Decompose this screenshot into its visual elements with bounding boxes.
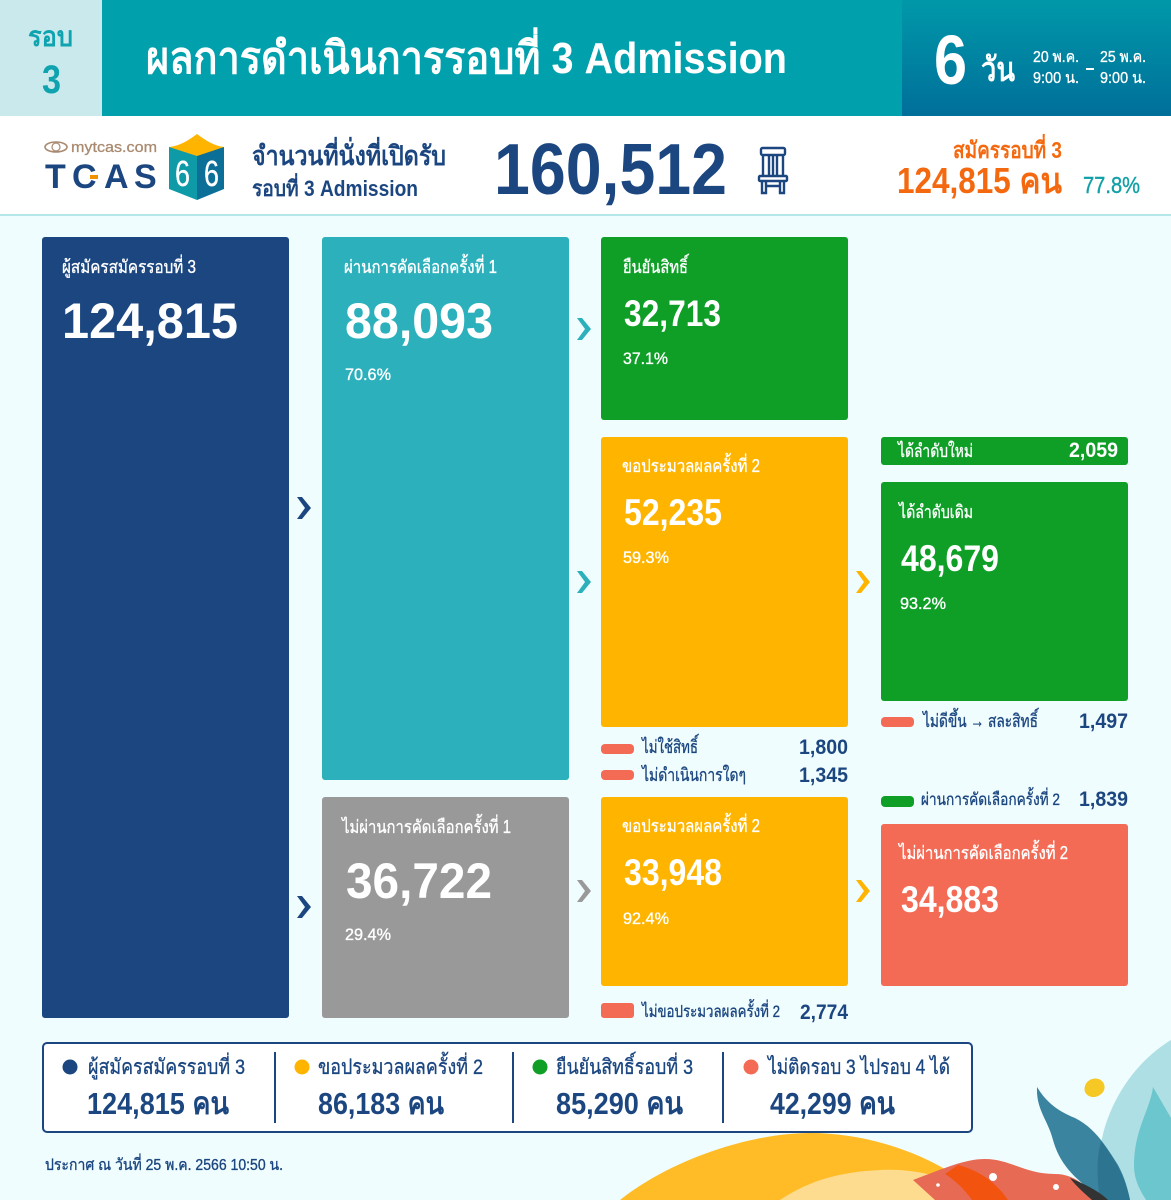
panel: applicants round 3: 124,815 [62,293,238,349]
icon: chair [759,148,787,193]
header: duration: 25 พ.ค. [1100,49,1146,66]
row: not improved, forfeited: 1,497 [1079,710,1128,733]
panel: same rank [881,482,1128,701]
header: round badge [0,0,102,116]
panel: confirmed [601,237,848,420]
panel: requested second processing, failed: ขอประมวลผลครั้งที่ 2 [622,813,760,836]
logo: mytcas TCAS 66: 6 [175,153,190,194]
summary: to round 4: 42,299 คน [770,1086,895,1121]
seats heading: รอบที่ 3 Admission [252,172,418,201]
panel: same rank: 48,679 [901,538,999,579]
summary: requested second processing [294,1052,483,1121]
panel: confirmed: 32,713 [624,293,721,334]
seats number: 160,512 [494,130,727,210]
row: not improved, forfeited: ไม่ดีขึ้น → สละสิทธิ์ [921,707,1040,731]
panel: applicants round 3: ผู้สมัครสมัครรอบที่ 3 [62,254,196,278]
summary box [43,1043,972,1132]
header: duration [902,0,1171,116]
applicants summary: 124,815 คน [897,160,1062,201]
header: duration: วัน [981,51,1015,89]
panel: passed first selection: ผ่านการคัดเลือกครั้งที่ 1 [344,254,497,277]
row: took no action [601,764,848,787]
panel: passed first selection: 70.6% [345,365,391,384]
panel: failed first selection [322,797,569,1018]
row: did not use right: ไม่ใช้สิทธิ์ [641,733,699,757]
applicants summary: 77.8% [1083,172,1140,198]
summary: requested second processing: ขอประมวลผลครั้งที่ 2 [318,1052,483,1079]
seats heading [252,136,446,201]
applicants summary [897,133,1140,201]
row: took no action: ไม่ดำเนินการใดๆ [640,764,746,785]
logo: mytcas TCAS 66: mytcas.com [71,139,157,156]
panel: new rank: ได้ลำดับใหม่ [896,440,973,461]
panel: failed first selection: ไม่ผ่านการคัดเลือกครั้งที่ 1 [340,814,511,837]
seats band [0,116,1171,216]
panel: same rank: ได้ลำดับเดิม [897,501,973,522]
panel: requested second processing, passed: ขอประมวลผลครั้งที่ 2 [622,453,760,476]
panel: applicants round 3 [42,237,289,1018]
panel: failed first selection: 29.4% [345,925,391,944]
panel: confirmed: ยืนยันสิทธิ์ [623,253,690,277]
row: passed second selection [881,787,1128,811]
logo: mytcas TCAS 66: 6 [204,153,219,194]
header: round badge: 3 [42,58,61,102]
row: did not use right [601,733,848,759]
row: did not request second processing [601,999,848,1024]
row: passed second selection: ผ่านการคัดเลือกครั้งที่ 2 [921,787,1060,809]
row: did not use right: 1,800 [799,736,848,759]
footer note: ประกาศ ณ วันที่ 25 พ.ค. 2566 10:50 น. [45,1153,283,1174]
applicants summary: สมัครรอบที่ 3 [953,133,1062,163]
summary: to round 4: ไม่ติดรอบ 3 ไปรอบ 4 ได้ [766,1055,950,1079]
decorative illustration: leaves and hills [620,1040,1171,1200]
summary: applicants: 124,815 คน [87,1086,229,1121]
seats heading: จำนวนที่นั่งที่เปิดรับ [252,136,446,171]
row: not improved, forfeited [881,707,1128,733]
panel: requested second processing, passed: 52,235 [624,492,722,533]
panel: failed second selection: 34,883 [901,879,999,920]
summary: requested second processing: 86,183 คน [318,1086,444,1121]
arrows between panels [297,318,870,918]
row: passed second selection: 1,839 [1079,788,1128,811]
summary: confirmed round 3: 85,290 คน [556,1086,683,1121]
summary: confirmed round 3 [532,1051,693,1121]
panel: requested second processing, failed: 33,948 [624,852,722,893]
panel: confirmed: 37.1% [623,349,668,368]
row: did not request second processing: 2,774 [800,1001,848,1024]
panel: requested second processing, passed: 59.3% [623,548,669,567]
panel: new rank: 2,059 [1069,439,1118,462]
logo: mytcas TCAS 66: TCAS [45,158,157,196]
panel: failed second selection [881,824,1128,986]
summary: to round 4 [744,1055,950,1121]
header: title [102,0,902,116]
panel: new rank [881,437,1128,465]
panel: requested second processing, failed: 92.4% [623,909,669,928]
header: duration: 20 พ.ค. [1033,49,1079,66]
summary: confirmed round 3: ยืนยันสิทธิ์รอบที่ 3 [556,1051,693,1079]
panel: failed second selection: ไม่ผ่านการคัดเลือกครั้งที่ 2 [897,840,1068,863]
row: did not request second processing: ไม่ขอประมวลผลครั้งที่ 2 [640,999,780,1021]
header: duration: 9:00 น. [1033,70,1079,87]
logo: mytcas TCAS 66 [45,134,224,200]
panel: same rank: 93.2% [900,594,946,613]
row: took no action: 1,345 [799,764,848,787]
panel: passed first selection: 88,093 [345,293,493,349]
summary: applicants [62,1052,245,1121]
panel: requested second processing, passed [601,437,848,727]
header: round badge: รอบ [28,21,73,52]
summary: applicants: ผู้สมัครสมัครรอบที่ 3 [88,1052,245,1080]
header: title: ผลการดำเนินการรอบที่ 3 Admission [146,27,787,83]
header: duration: 9:00 น. [1100,70,1146,87]
panel: failed first selection: 36,722 [346,853,492,909]
header: duration: 6 [934,21,967,99]
panel: requested second processing, failed [601,797,848,986]
panel: passed first selection [322,237,569,780]
